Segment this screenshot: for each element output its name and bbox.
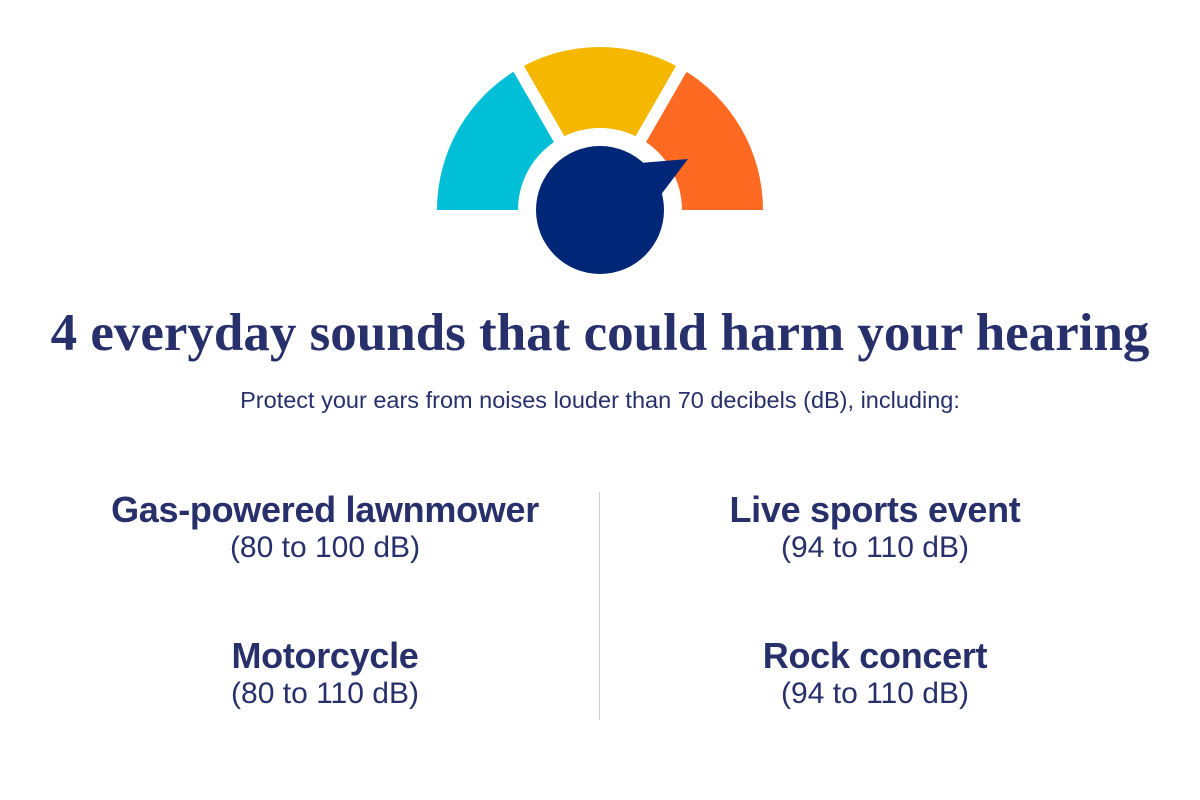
item: concert: (94 to 110 dB) xyxy=(781,677,969,710)
subtitle: Protect your ears from noises louder than 70 decibels (dB), including: xyxy=(240,387,960,413)
item: motorcycle: Motorcycle xyxy=(231,635,419,676)
icon: gauge xyxy=(437,47,763,274)
item: sports: (94 to 110 dB) xyxy=(781,531,969,564)
divider xyxy=(599,492,600,720)
item: motorcycle xyxy=(231,635,419,710)
item: motorcycle: (80 to 110 dB) xyxy=(231,677,419,710)
item: lawnmower: (80 to 100 dB) xyxy=(230,531,420,564)
item: concert: Rock concert xyxy=(763,635,987,676)
title: 4 everyday sounds that could harm your hearing xyxy=(51,304,1149,362)
item: sports xyxy=(729,489,1020,564)
item: sports: Live sports event xyxy=(729,489,1020,530)
item: lawnmower xyxy=(111,489,539,564)
item: concert xyxy=(763,635,988,710)
item: lawnmower: Gas-powered lawnmower xyxy=(111,489,539,530)
